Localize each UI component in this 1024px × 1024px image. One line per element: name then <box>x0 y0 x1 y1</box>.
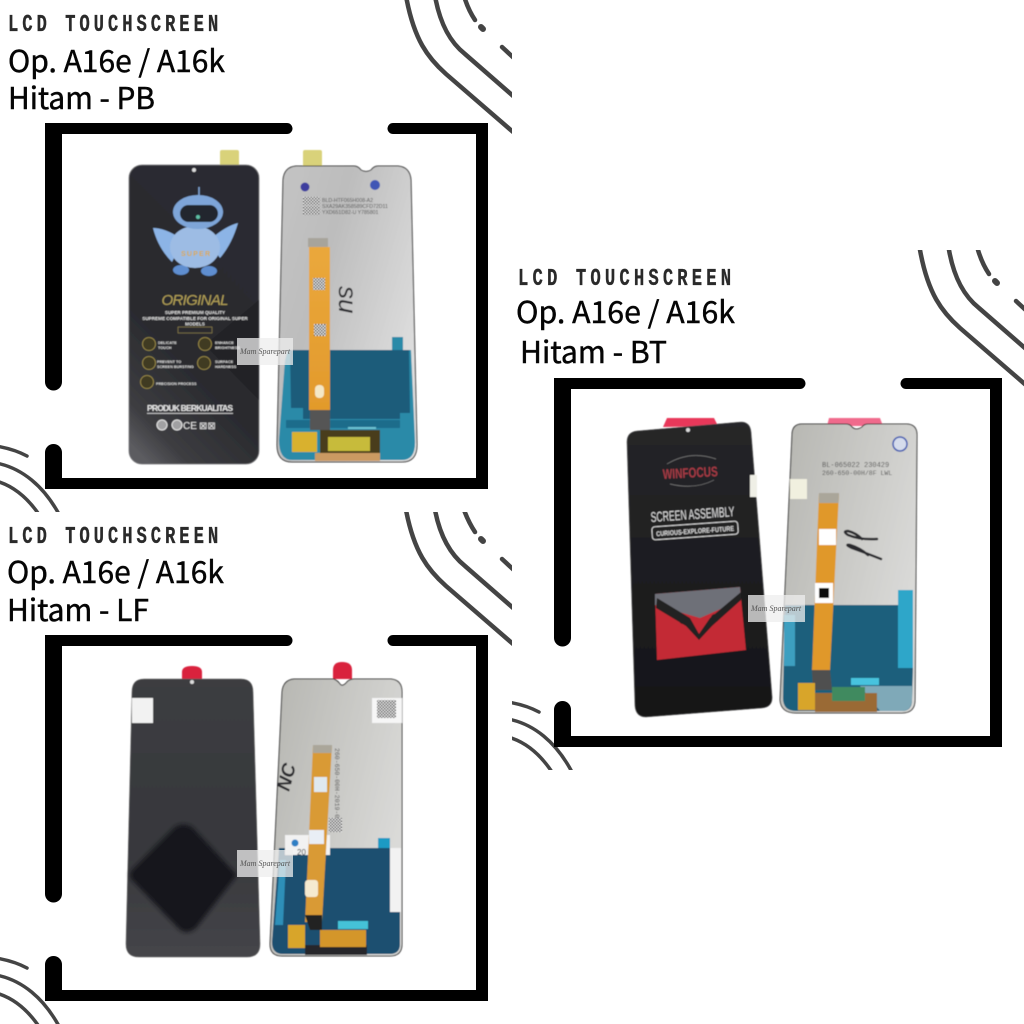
decorative curves: top right BT <box>920 250 1024 392</box>
phone front LF <box>126 666 260 957</box>
connector <box>292 432 317 452</box>
connector <box>798 683 815 710</box>
decorative curves: bottom left PB <box>0 446 60 516</box>
decorative curves: bottom left LF <box>0 958 60 1024</box>
icon: robot mascot <box>153 187 238 276</box>
labels on back <box>322 198 388 216</box>
labels on back: YXD651D82-U Y785801 <box>322 210 379 216</box>
feature labels: PREVENT TO <box>157 360 181 364</box>
feature labels: SCREEN BURSTING <box>157 365 194 369</box>
handwriting <box>845 531 881 559</box>
decorative curves: bottom left BT <box>508 702 572 772</box>
certification marks <box>157 420 182 430</box>
tagline box: CURIOUS-EXPLORE-FUTURE <box>656 526 735 538</box>
feature labels: PRECISION PROCESS <box>156 382 197 386</box>
labels on back: BLD-HTF065H008-A2 <box>322 198 373 204</box>
decorative curves: top right LF <box>406 510 520 650</box>
phone front PB: PRODUK BERKUALITAS <box>147 403 233 413</box>
small heading: LCD TOUCHSCREEN LF: LCD TOUCHSCREEN <box>8 525 218 551</box>
phone front PB: MODELS <box>185 322 205 326</box>
frame BT <box>554 378 1002 747</box>
feature labels: DELICATE <box>158 341 177 345</box>
flex ribbon <box>305 745 332 922</box>
phone front PB: SUPER PREMIUM QUALITY <box>165 310 225 315</box>
feature labels: TOUCH <box>158 346 172 350</box>
phone front PB: ORIGINAL <box>162 292 228 309</box>
phone front BT <box>627 418 772 717</box>
handwriting: NC <box>274 761 301 793</box>
frame LF <box>45 635 488 1001</box>
title: model PB: Op. A16e / A16k <box>8 37 225 81</box>
panel: Hitam BT <box>508 250 1024 772</box>
vertical label text: 260-650-00H-2019-05 <box>333 748 340 822</box>
phone front PB: CE <box>183 421 197 432</box>
phone back BT <box>780 418 917 713</box>
decorative curves: top right PB <box>406 0 520 138</box>
flex ribbon <box>308 238 328 247</box>
connector <box>288 925 305 948</box>
icon: owl logo <box>655 587 746 660</box>
watermark PB: Mam Sparepart <box>239 347 291 356</box>
icon: robot mascot: SUPER <box>181 251 210 258</box>
blue sticker: 20 <box>297 848 306 857</box>
frame PB <box>45 123 488 489</box>
phone front PB: ⊠⊠ <box>199 421 216 432</box>
watermark LF <box>237 850 293 877</box>
phone front BT: SCREEN ASSEMBLY <box>650 503 735 525</box>
feature labels: BRIGHTNESS <box>215 346 240 350</box>
phone front PB: SUPREME COMPATIBLE FOR ORIGINAL SUPER <box>142 316 248 321</box>
blue sticker <box>285 835 330 857</box>
watermark BT <box>748 595 805 622</box>
labels on back: 260-650-00H/8F LWL <box>822 470 892 477</box>
tagline box <box>652 521 738 540</box>
flex ribbon <box>812 493 839 670</box>
watermark PB <box>237 338 293 365</box>
phone back LF <box>270 662 402 956</box>
panel: Hitam LF <box>0 510 520 1024</box>
watermark BT: Mam Sparepart <box>750 604 802 613</box>
feature labels: SURFACE <box>215 360 234 364</box>
panel: Hitam PB <box>0 0 520 516</box>
title: model LF: Op. A16e / A16k <box>7 548 224 592</box>
subtitle: Hitam BT: Hitam - BT <box>520 328 667 372</box>
feature labels: ENHANCE <box>215 341 234 345</box>
phone front PB <box>129 150 259 464</box>
phone back PB <box>277 150 417 462</box>
labels on back: SXA29AK358589CFD72D11 <box>322 204 388 210</box>
subtitle: Hitam LF: Hitam - LF <box>7 586 149 630</box>
watermark LF: Mam Sparepart <box>239 859 291 868</box>
labels on back: BL-065022 230429 <box>822 462 889 470</box>
subtitle: Hitam PB: Hitam - PB <box>8 74 155 118</box>
feature labels <box>156 341 240 386</box>
small heading: LCD TOUCHSCREEN PB: LCD TOUCHSCREEN <box>8 13 218 39</box>
feature icons <box>140 338 212 388</box>
handwriting: su <box>333 286 363 313</box>
phone front BT: WINFOCUS <box>662 463 718 482</box>
title: model BT: Op. A16e / A16k <box>516 288 735 332</box>
labels on back <box>822 462 892 477</box>
small heading: LCD TOUCHSCREEN BT: LCD TOUCHSCREEN <box>518 267 731 293</box>
feature labels: HARDNESS <box>215 365 237 369</box>
